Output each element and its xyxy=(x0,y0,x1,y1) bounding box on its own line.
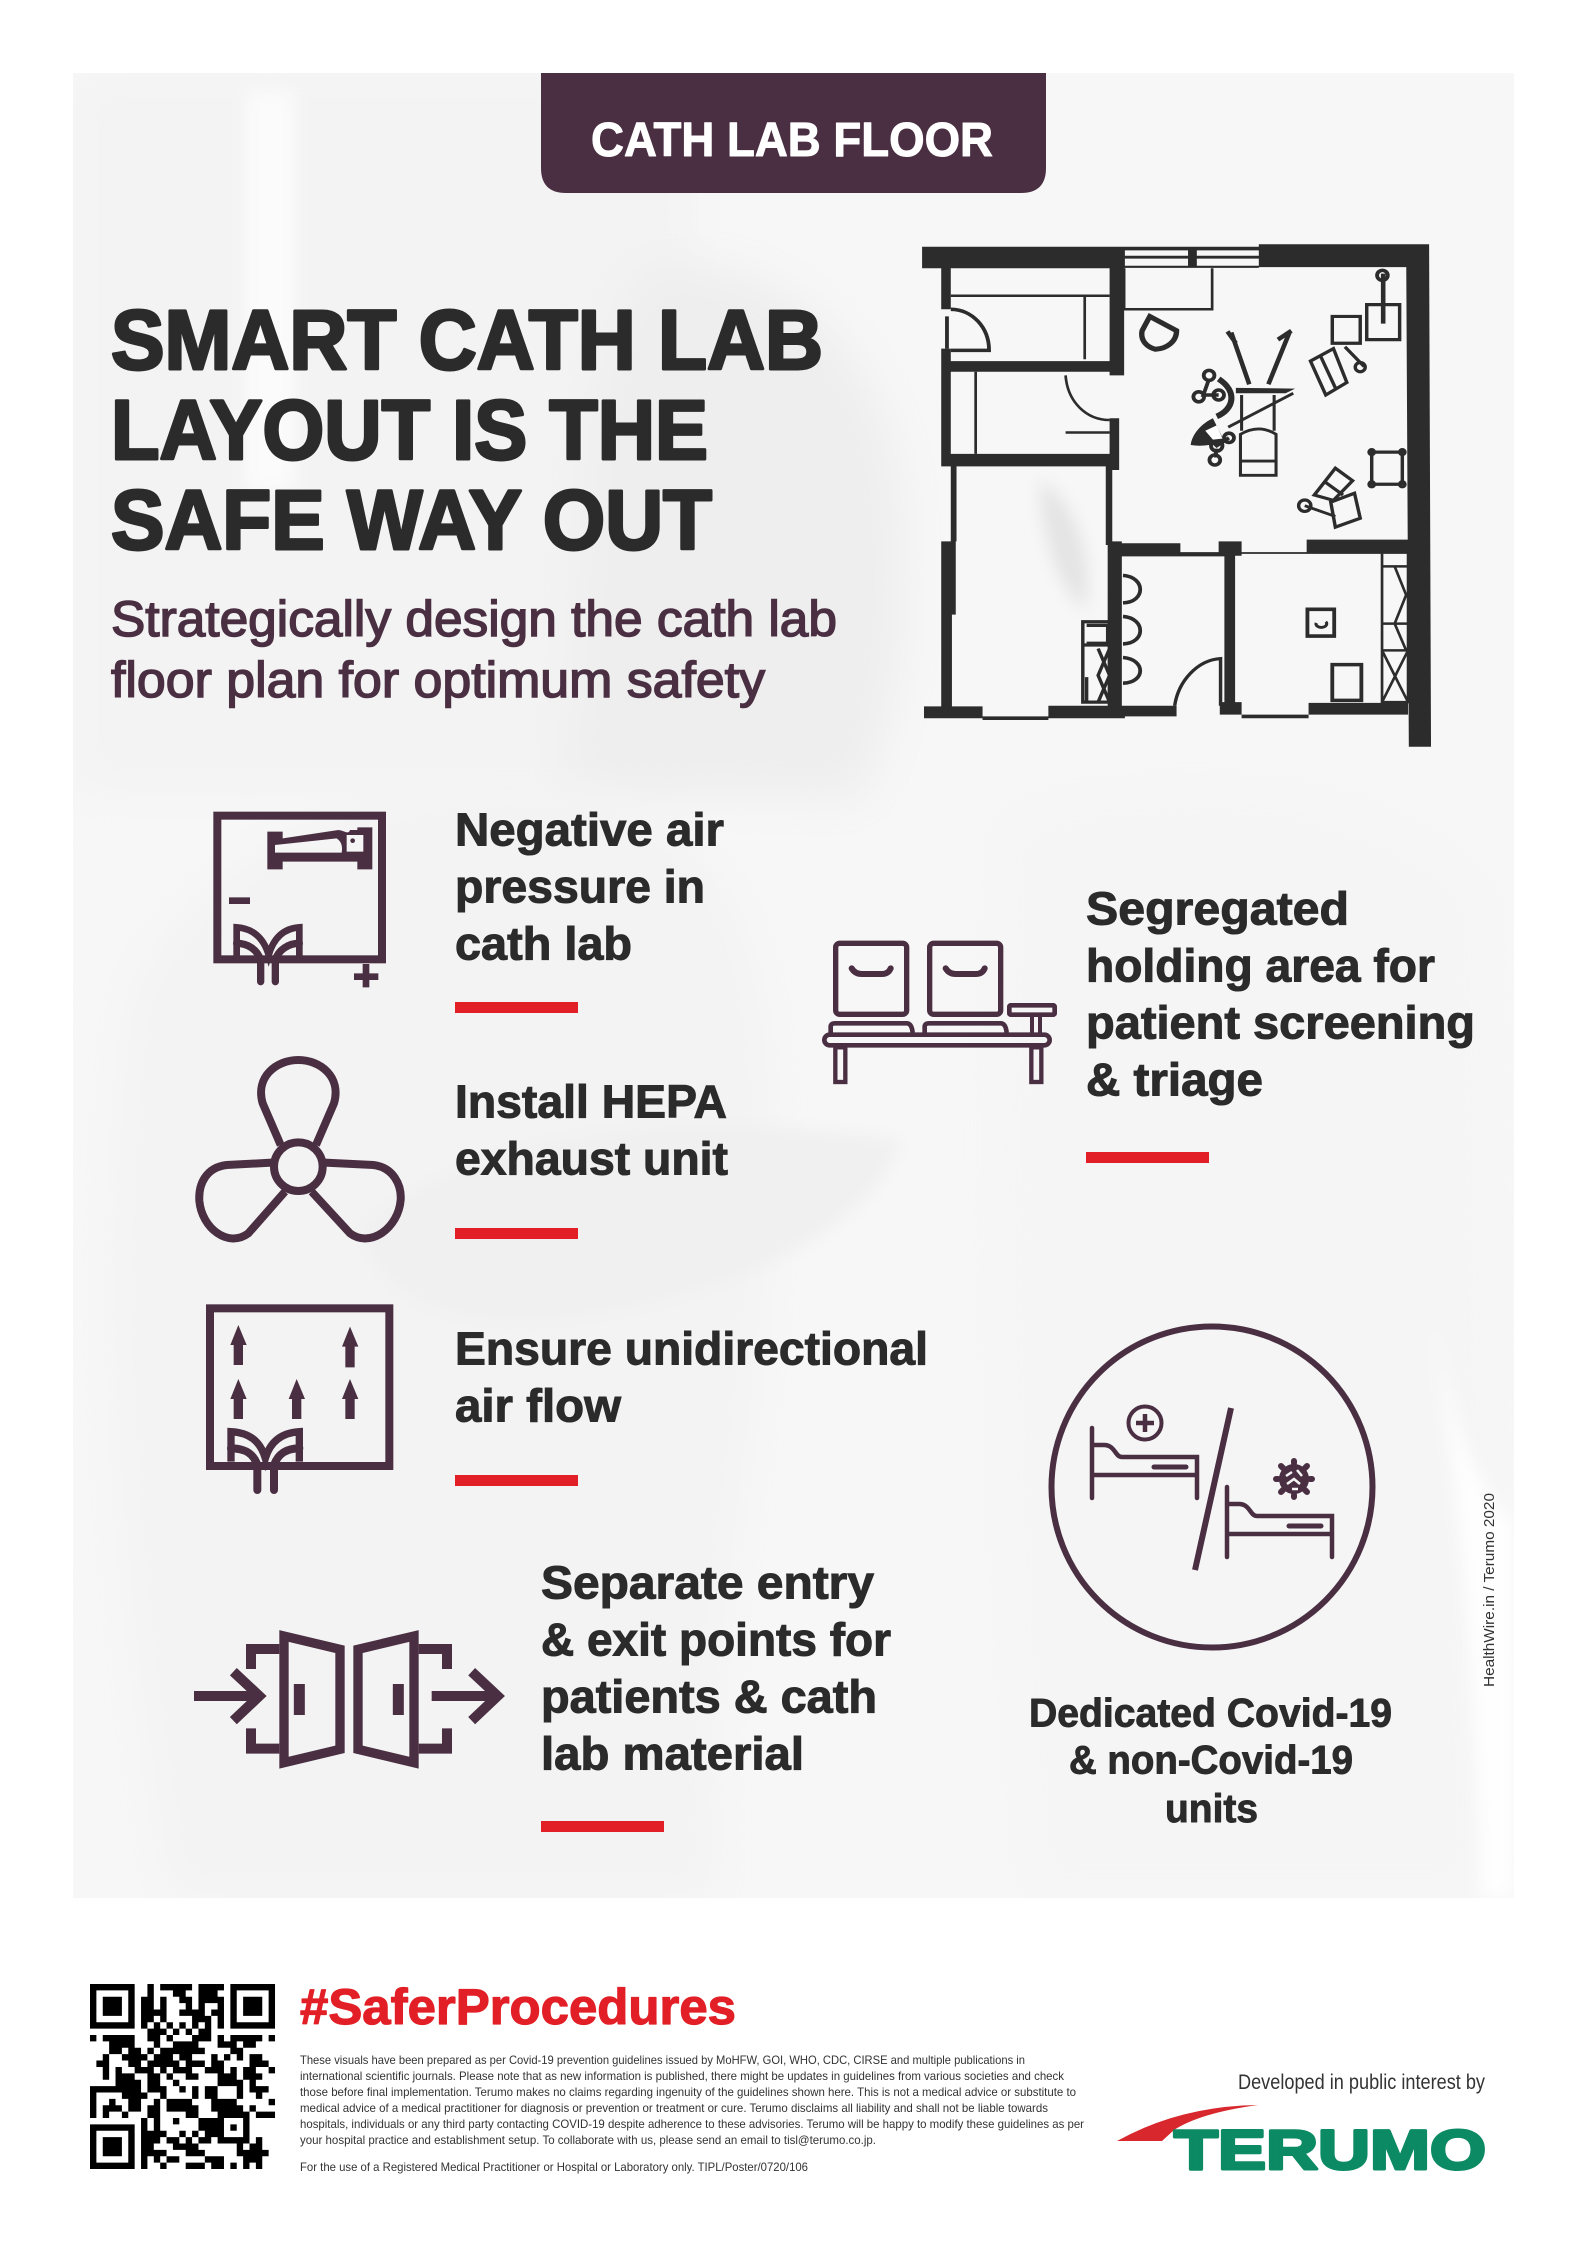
text: HEPA exhaust: exhaust unit xyxy=(455,1132,728,1184)
text: HEPA exhaust xyxy=(455,1076,728,1239)
text: dedicated covid units xyxy=(1029,1692,1392,1831)
subtitle xyxy=(111,591,837,708)
icon: holding area bench xyxy=(824,943,1055,1082)
icon: negative pressure room xyxy=(217,816,382,987)
title: SAFE WAY OUT xyxy=(111,473,712,567)
background photo panel xyxy=(73,73,1514,1898)
text: dedicated covid units: units xyxy=(1165,1787,1258,1831)
subtitle: floor plan for optimum safety xyxy=(111,652,765,708)
text: negative air pressure: cath lab xyxy=(455,918,632,970)
text: unidirectional air flow xyxy=(455,1322,928,1486)
text: negative air pressure: pressure in xyxy=(455,860,705,912)
text: separate entry exit: Separate entry xyxy=(541,1556,874,1608)
header tab xyxy=(541,73,1046,193)
title: SMART CATH LAB xyxy=(111,293,823,387)
hashtag: #SaferProcedures xyxy=(300,1979,736,2035)
disclaimer: your hospital practice and establishment setup. To collaborate with us, please send an email to tisl@terumo.co.jp. xyxy=(300,2133,876,2147)
subtitle: Strategically design the cath lab xyxy=(111,591,837,647)
header tab: CATH LAB FLOOR xyxy=(591,114,993,167)
text: segregated holding area: holding area for xyxy=(1086,940,1435,992)
text: dedicated covid units: & non-Covid-19 xyxy=(1069,1738,1353,1782)
text: HEPA exhaust: Install HEPA xyxy=(455,1076,727,1128)
disclaimer: those before final implementation. Terumo makes no claims regarding ingenuity of the guidelines shown here. This is not a medical advice or substitute to xyxy=(300,2085,1076,2099)
text: unidirectional air flow: Ensure unidirectional xyxy=(455,1322,928,1374)
text: negative air pressure: Negative air xyxy=(455,804,724,856)
developed by: Developed in public interest by xyxy=(1238,2071,1485,2094)
disclaimer: These visuals have been prepared as per Covid-19 prevention guidelines issued by MoHFW, GOI, WHO, CDC, CIRSE and multiple publications in xyxy=(300,2053,1025,2067)
floor plan xyxy=(922,244,1431,747)
text: segregated holding area: Segregated xyxy=(1086,882,1349,934)
QR code xyxy=(90,1984,275,2169)
text: separate entry exit xyxy=(541,1556,891,1832)
text: segregated holding area: patient screening xyxy=(1086,996,1475,1048)
disclaimer: medical advice of a medical practitioner for diagnosis or prevention or treatment or cure. Terumo disclaims all liability and shall not be liable towards xyxy=(300,2101,1048,2115)
title xyxy=(111,293,823,567)
text: segregated holding area xyxy=(1086,882,1475,1163)
text: separate entry exit: patients & cath xyxy=(541,1670,877,1722)
text: dedicated covid units: Dedicated Covid-19 xyxy=(1029,1692,1392,1736)
Terumo logo: TERUMO xyxy=(1174,2118,1486,2181)
Terumo logo xyxy=(1117,2105,1486,2181)
text: separate entry exit: lab material xyxy=(541,1728,804,1780)
text: separate entry exit: & exit points for xyxy=(541,1614,891,1666)
text: negative air pressure xyxy=(455,804,724,1013)
title: LAYOUT IS THE xyxy=(111,383,708,477)
credit: HealthWire.in / Terumo 2020 xyxy=(1481,1493,1498,1687)
disclaimer: international scientific journals. Please note that as new information is published, there might be updates in guidelines from various societies and check xyxy=(300,2069,1065,2083)
disclaimer xyxy=(300,2053,1084,2174)
icon: HEPA fan xyxy=(199,1060,401,1238)
disclaimer: For the use of a Registered Medical Practitioner or Hospital or Laboratory only. TIPL/Poster/0720/106 xyxy=(300,2160,808,2174)
icon: doors entry exit xyxy=(194,1636,498,1763)
text: segregated holding area: & triage xyxy=(1086,1054,1263,1106)
icon: unidirectional air flow xyxy=(210,1308,389,1490)
text: unidirectional air flow: air flow xyxy=(455,1380,621,1432)
icon: dedicated covid units xyxy=(1052,1326,1372,1648)
disclaimer: hospitals, individuals or any third party contacting COVID-19 despite adherence to these advisories. Terumo will be happy to modify these guidelines as per xyxy=(300,2117,1084,2131)
